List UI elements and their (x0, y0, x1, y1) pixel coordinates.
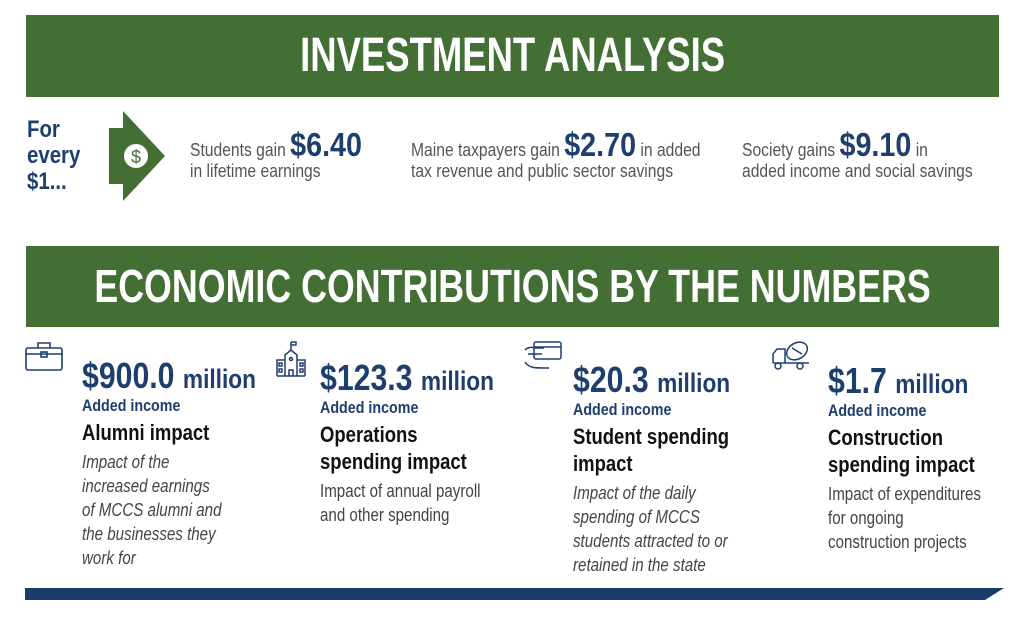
stat: taxpayers: Maine taxpayers gain $2.70 in added (411, 126, 701, 163)
icon: dollar arrow: $ (131, 147, 141, 167)
column: alumni: the businesses they (82, 524, 216, 544)
column: construction: Construction (828, 425, 943, 450)
column: alumni: increased earnings (82, 476, 210, 496)
icon: school (276, 341, 306, 377)
column: construction: Added income (828, 401, 926, 420)
column: operations: Added income (320, 398, 418, 417)
icon: card in hand (524, 341, 562, 369)
banner: economic contributions: ECONOMIC CONTRIBUTIONS BY THE NUMBERS (94, 260, 931, 312)
column: operations: Impact of annual payroll and other spending (320, 481, 481, 525)
stat: taxpayers (411, 126, 701, 181)
column: construction (828, 360, 981, 552)
stat: students: Students gain $6.40 (190, 126, 362, 163)
column: alumni: $900.0 million (82, 355, 256, 396)
icon: briefcase (25, 342, 63, 371)
column: alumni: Added income (82, 396, 180, 415)
column: operations (320, 357, 494, 525)
stat: students (190, 126, 362, 181)
icon: dollar arrow (109, 111, 165, 201)
column: alumni: Impact of the (82, 452, 169, 472)
text: for every $1: every (27, 142, 80, 169)
column: operations: $123.3 million (320, 357, 494, 398)
column: alumni: of MCCS alumni and (82, 500, 222, 520)
column: alumni: Alumni impact (82, 420, 209, 445)
banner: investment analysis: INVESTMENT ANALYSIS (300, 29, 725, 82)
banner: investment analysis (26, 15, 999, 97)
column: operations: spending impact (320, 449, 467, 474)
stat: society (742, 126, 973, 181)
stat: students: in lifetime earnings (190, 161, 321, 181)
stat: society: Society gains $9.10 in (742, 126, 928, 163)
column: alumni: work for (82, 548, 136, 568)
column: student spending: $20.3 million (573, 359, 730, 400)
column: alumni (82, 355, 256, 568)
column: student spending (573, 359, 730, 575)
footer bar (25, 588, 1004, 600)
column: student spending: Student spending (573, 424, 729, 449)
column: construction: $1.7 million (828, 360, 968, 401)
column: student spending: impact (573, 451, 633, 476)
banner: economic contributions (26, 246, 999, 327)
text: for every $1 (27, 116, 80, 195)
icon: cement truck (772, 341, 809, 370)
column: construction: spending impact (828, 452, 975, 477)
text: for every $1: For (27, 116, 60, 143)
column: construction: Impact of expenditures for ongoing construction projects (828, 484, 981, 552)
stat: society: added income and social savings (742, 161, 973, 181)
column: student spending: Impact of the daily spending of MCCS students attracted to or retained in the state (573, 483, 728, 575)
text: for every $1: $1... (27, 168, 67, 195)
column: student spending: Added income (573, 400, 671, 419)
column: operations: Operations (320, 422, 418, 447)
stat: taxpayers: tax revenue and public sector savings (411, 161, 673, 181)
